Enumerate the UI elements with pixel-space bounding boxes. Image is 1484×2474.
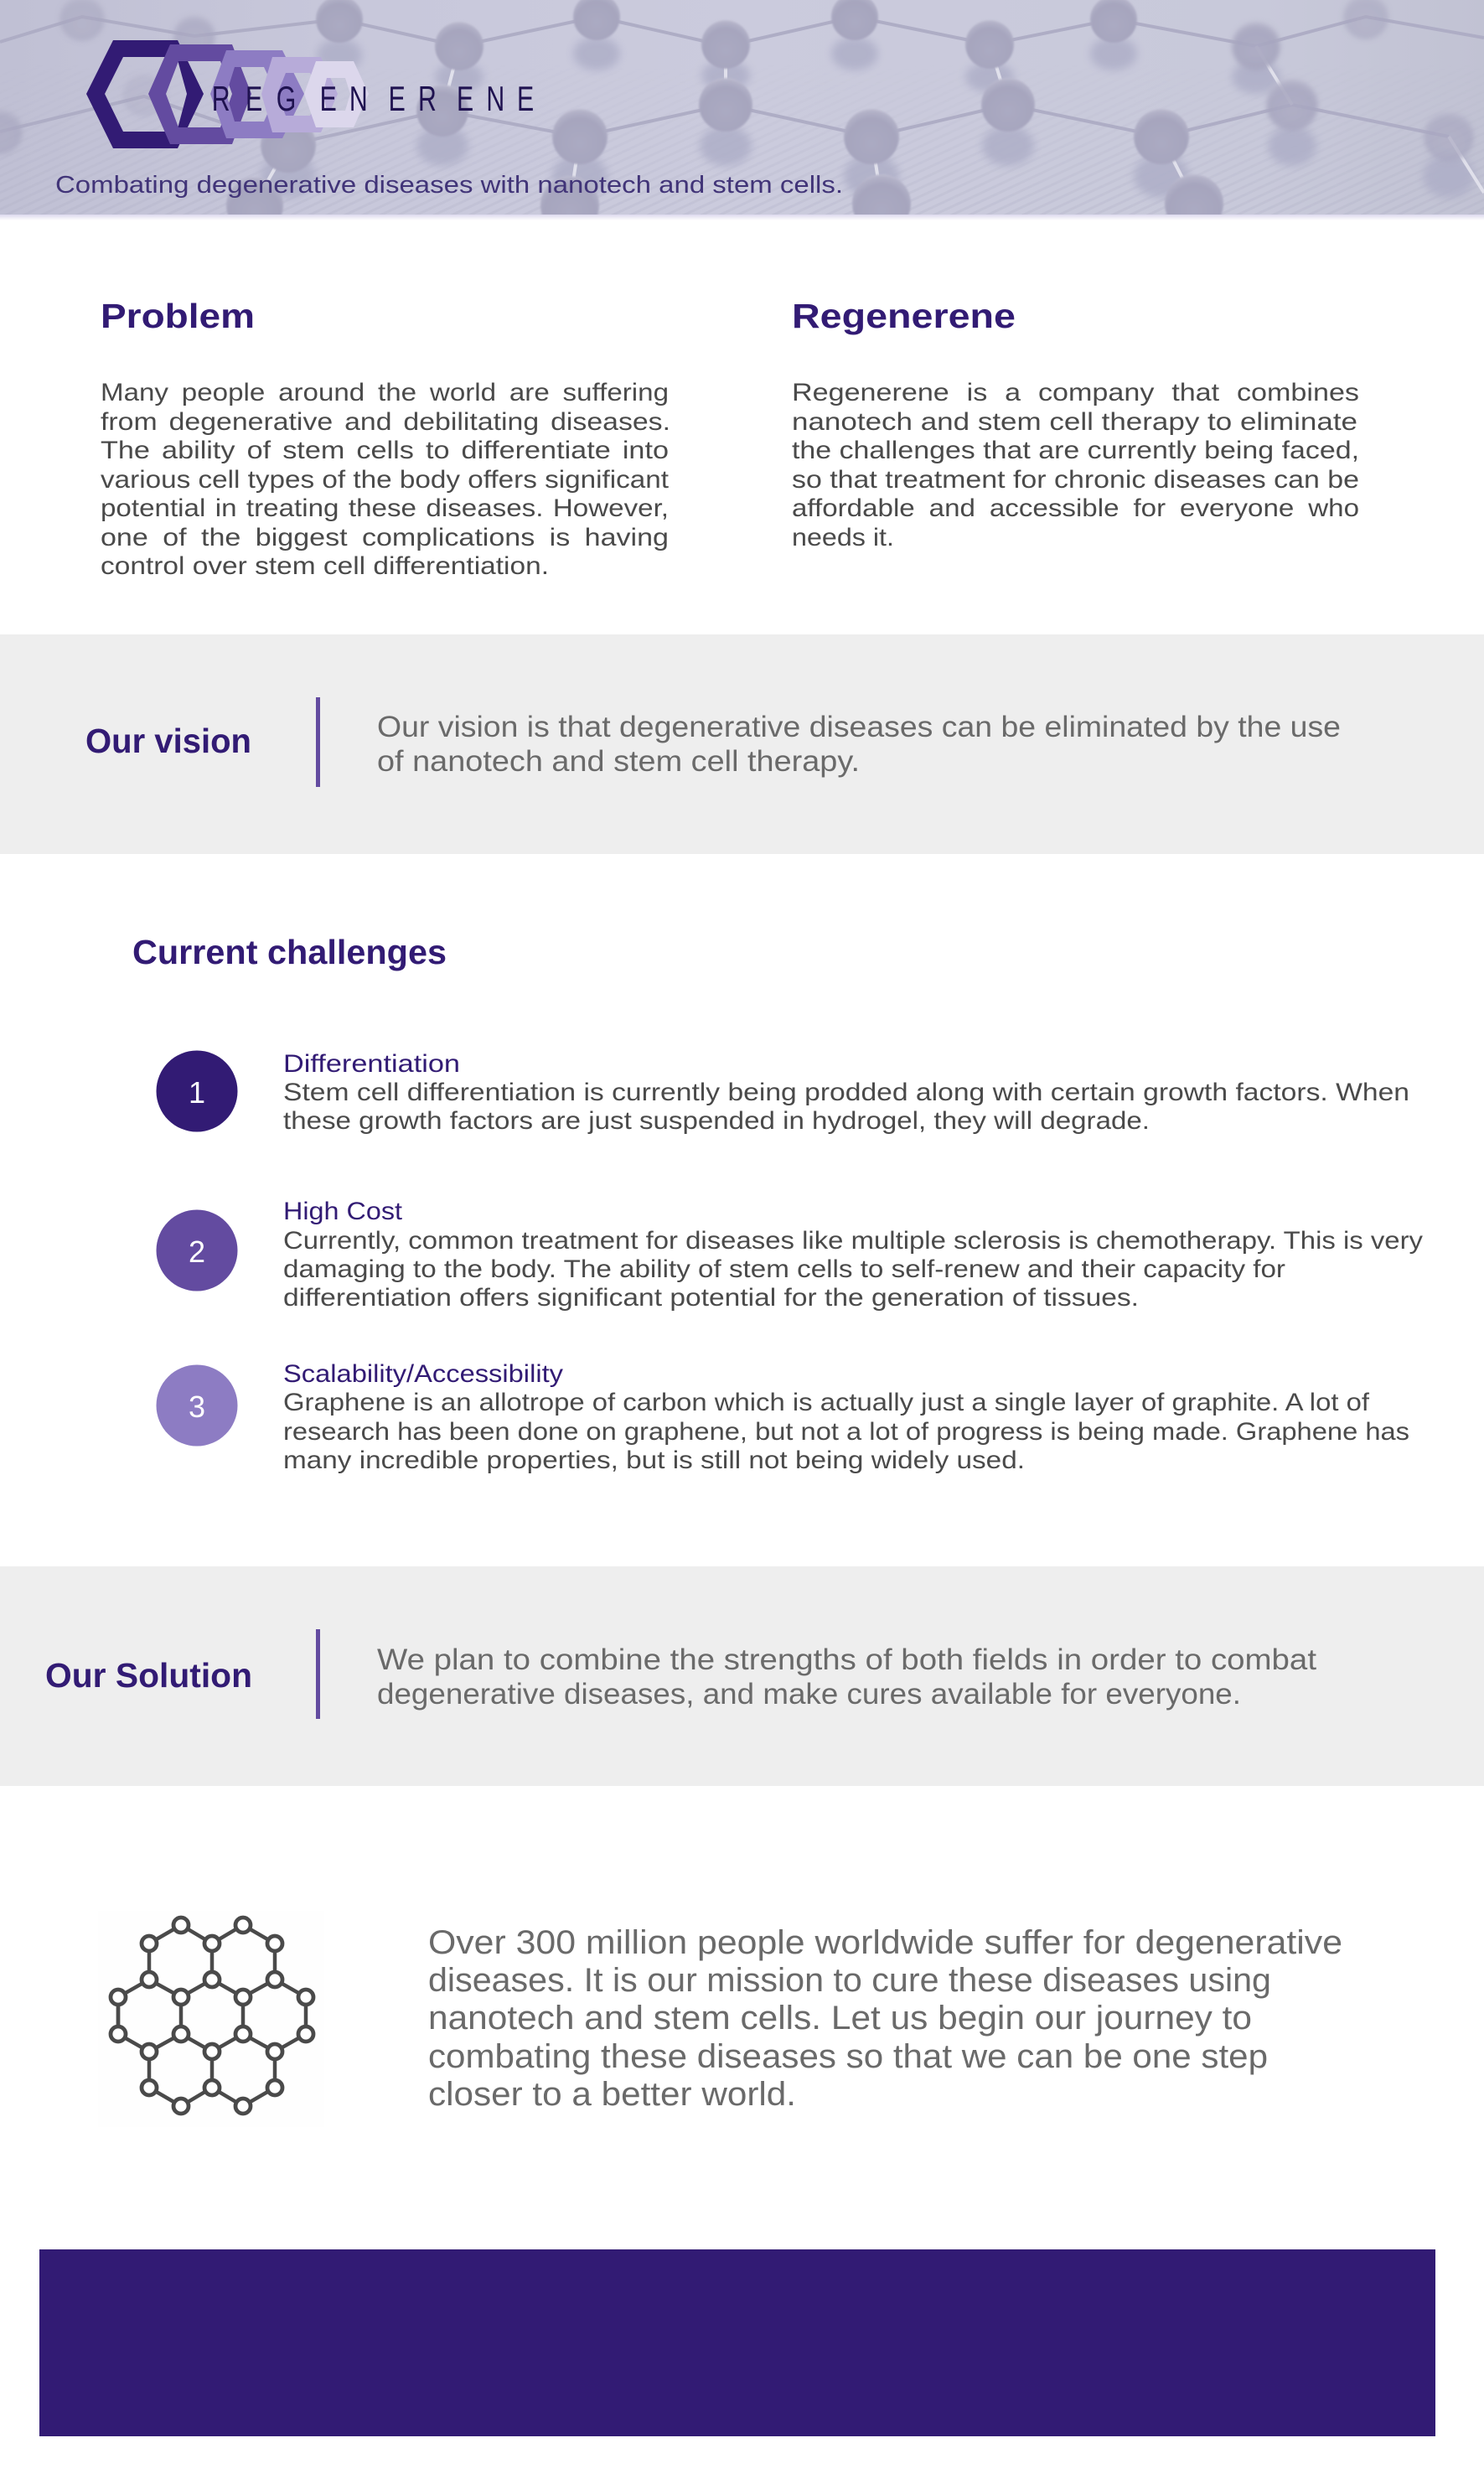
icon: number 3 — [156, 1364, 238, 1447]
text block: solution statement: degenerative diseases, and make cures available for everyone. — [377, 1678, 1241, 1711]
challenge 2 text: differentiation offers significant potential for the generation of tissues. — [283, 1284, 1139, 1312]
heading: problem: Problem — [101, 297, 255, 335]
icon: number 1: 1 — [189, 1075, 205, 1110]
challenge 2 text — [283, 1198, 1423, 1312]
panel: our vision — [0, 634, 1484, 854]
text block: problem description: Many people around the world are suffering — [101, 379, 669, 406]
challenge 1 text — [283, 1050, 1409, 1135]
text block: closing mission statement: closer to a better world. — [428, 2076, 796, 2113]
text block: regenerene description: needs it. — [792, 524, 894, 551]
header banner — [0, 0, 1484, 235]
text block: problem description — [101, 379, 670, 580]
molecular background — [0, 0, 1484, 235]
heading: our vision: Our vision — [85, 722, 251, 760]
icon: number 2: 2 — [189, 1234, 205, 1269]
text block: regenerene description: Regenerene is a company that combines — [792, 379, 1359, 406]
text block: closing mission statement: diseases. It is our mission to cure these diseases using — [428, 1962, 1271, 1999]
icon: number 1 — [156, 1051, 238, 1131]
challenge 3 text: research has been done on graphene, but not a lot of progress is being made. Graphene has — [283, 1418, 1409, 1446]
challenge 1 text: Differentiation — [283, 1050, 460, 1078]
text block: regenerene description: so that treatment for chronic diseases can be — [792, 466, 1359, 494]
icon: graphene lattice — [98, 1911, 324, 2127]
panel: problem — [101, 297, 670, 580]
text block: solution statement: We plan to combine the strengths of both fields in order to combat — [377, 1643, 1316, 1676]
challenge 3 text: Scalability/Accessibility — [283, 1360, 563, 1388]
text block: vision statement: of nanotech and stem cell therapy. — [377, 745, 860, 778]
challenge 3: scalability — [156, 1360, 1409, 1474]
challenge 2 text: Currently, common treatment for diseases like multiple sclerosis is chemotherapy. This is very — [283, 1227, 1423, 1255]
text block: regenerene description: affordable and accessible for everyone who — [792, 494, 1359, 522]
text block: regenerene description — [792, 379, 1359, 551]
tagline: Combating degenerative diseases with nanotech and stem cells. — [55, 172, 843, 199]
panel: current challenges — [132, 933, 1423, 1474]
heading: current challenges: Current challenges — [132, 933, 447, 971]
text block: problem description: potential in treating these diseases. However, — [101, 494, 669, 522]
icon: number 3: 3 — [189, 1390, 205, 1424]
heading: regenerene: Regenerene — [792, 297, 1016, 335]
challenge 3 text: many incredible properties, but is still not being widely used. — [283, 1447, 1025, 1474]
logo: overlapping hexagons — [86, 40, 369, 148]
challenge 3 text — [283, 1360, 1409, 1474]
text block: problem description: from degenerative and debilitating diseases. — [101, 408, 670, 436]
text block: regenerene description: nanotech and stem cell therapy to eliminate — [792, 408, 1357, 436]
text block: problem description: various cell types of the body offers significant — [101, 466, 670, 494]
challenge 2 text: High Cost — [283, 1198, 403, 1225]
text block: problem description: one of the biggest complications is having — [101, 524, 669, 551]
footer bar — [39, 2249, 1435, 2436]
text block: solution statement — [377, 1643, 1316, 1711]
text block: closing mission statement — [428, 1924, 1342, 2113]
heading: our solution: Our Solution — [45, 1656, 252, 1695]
panel: our solution — [0, 1566, 1484, 1786]
text block: regenerene description: the challenges that are currently being faced, — [792, 437, 1359, 464]
challenge 1 text: Stem cell differentiation is currently being prodded along with certain growth factors. When — [283, 1079, 1409, 1106]
challenge 2: high cost — [156, 1198, 1423, 1312]
icon: number 2 — [156, 1210, 238, 1291]
logo wordmark: REGENERENE — [212, 79, 534, 118]
text block: problem description: The ability of stem cells to differentiate into — [101, 437, 669, 464]
text block: closing mission statement: combating these diseases so that we can be one step — [428, 2038, 1268, 2075]
challenge 3 text: Graphene is an allotrope of carbon which is actually just a single layer of graphite. A lot of — [283, 1389, 1370, 1416]
text block: vision statement — [377, 711, 1341, 778]
challenge 2 text: damaging to the body. The ability of stem cells to self-renew and their capacity for — [283, 1255, 1285, 1283]
text block: closing mission statement: Over 300 million people worldwide suffer for degenerative — [428, 1924, 1342, 1961]
challenge 1: differentiation — [156, 1050, 1409, 1135]
text block: vision statement: Our vision is that degenerative diseases can be eliminated by the use — [377, 711, 1341, 743]
text block: problem description: control over stem cell differentiation. — [101, 552, 549, 580]
panel: regenerene — [792, 297, 1359, 551]
text block: closing mission statement: nanotech and stem cells. Let us begin our journey to — [428, 2000, 1252, 2037]
challenge 1 text: these growth factors are just suspended in hydrogel, they will degrade. — [283, 1107, 1150, 1135]
